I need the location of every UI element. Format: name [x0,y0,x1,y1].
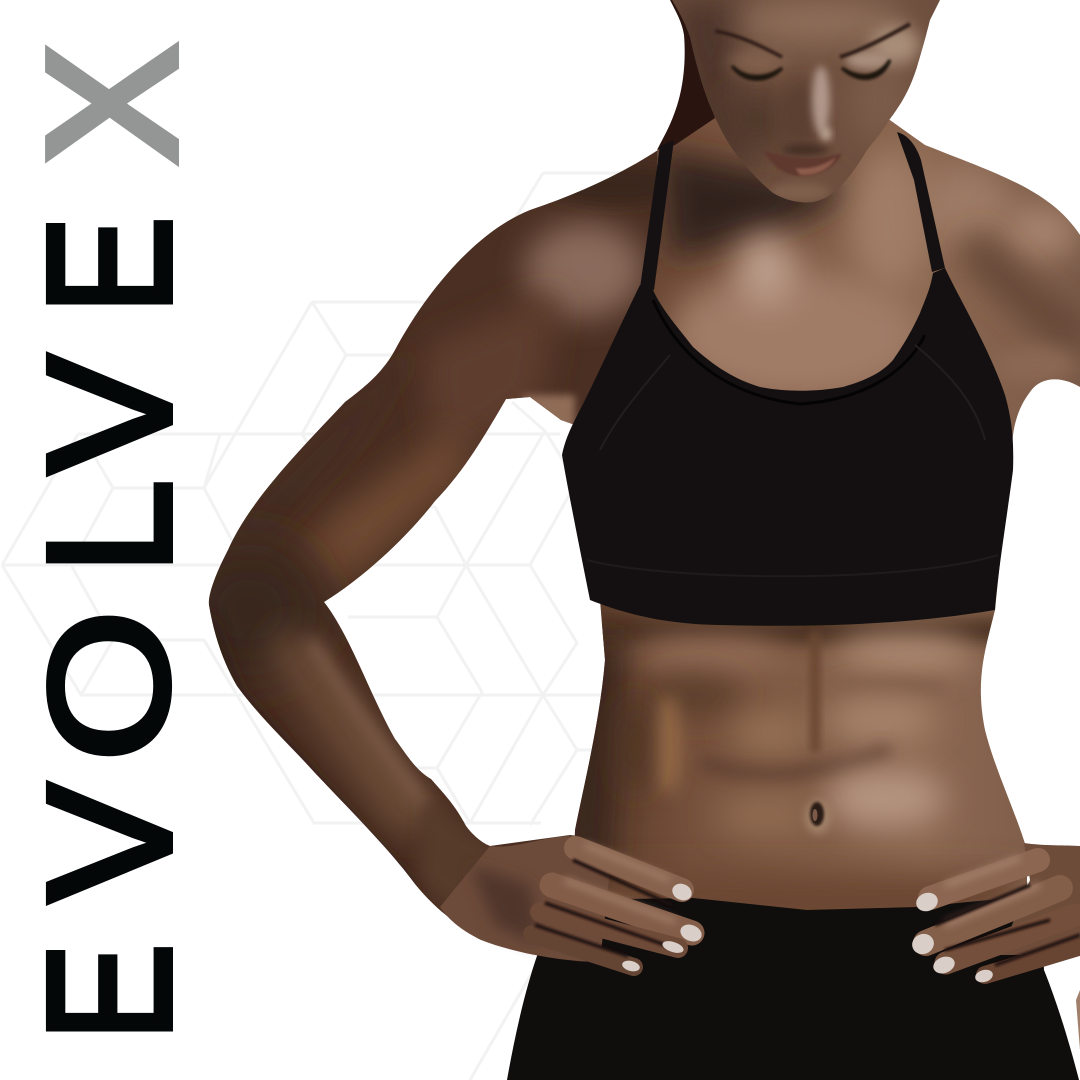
hair [657,0,715,150]
fingernails [621,881,704,973]
right hip sliver [1076,990,1080,1050]
lips [763,150,842,176]
model: head [672,0,940,202]
wordmark: EVOLVEX [10,45,215,1041]
model: left arm [208,150,658,917]
abdominal shading [580,618,1010,644]
letter V: V [11,355,208,474]
navel [805,800,831,834]
letter L: L [11,480,208,574]
bra body [562,268,1013,626]
letter E: E [11,943,208,1041]
letter O: O [14,610,204,762]
fingernails [909,890,994,984]
hexagon line pattern [2,173,640,1080]
eyelashes [732,66,782,79]
model: right hand [909,843,1080,984]
letter E: E [11,216,208,314]
bra left strap [640,140,674,290]
chest shading [670,270,920,400]
bra right strap [897,132,945,272]
model: shorts [507,895,1079,1080]
letter V: V [11,783,208,902]
nose [786,82,816,143]
model: left hand [440,836,704,973]
right shoulder shading [920,165,1010,245]
model: sports bra [562,132,1013,626]
letter X: X [10,45,215,164]
model: torso, chest and shoulders [560,100,1080,940]
eyebrows [715,31,782,57]
